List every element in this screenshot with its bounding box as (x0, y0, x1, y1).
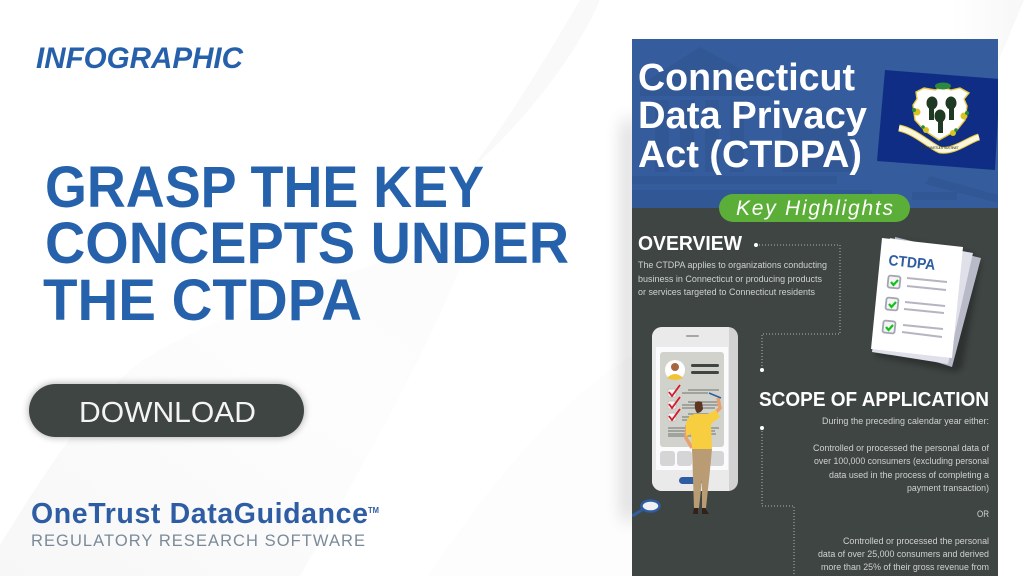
illustration: phone with person (652, 327, 738, 514)
panel title: Data Privacy (638, 95, 867, 137)
logo: OneTrust DataGuidance: TM (368, 506, 379, 515)
text: scope body (813, 416, 990, 573)
main heading: CONCEPTS UNDER (45, 211, 569, 276)
text: scope body: payment transaction) (907, 483, 989, 494)
text: overview body: business in Connecticut or producing products (638, 274, 822, 285)
text: overview body: The CTDPA applies to organizations conducting (638, 260, 827, 271)
logo: OneTrust DataGuidance: REGULATORY RESEARCH SOFTWARE (31, 532, 365, 550)
panel title: Act (CTDPA) (638, 134, 862, 176)
main heading: GRASP THE KEY (45, 155, 484, 220)
download button (29, 384, 304, 437)
icon: CTDPA checklist document (871, 237, 981, 372)
connector: scope continuation (760, 426, 794, 576)
connector: overview to scope (754, 243, 840, 372)
pill: key highlights (719, 194, 910, 222)
text: overview body: or services targeted to Connecticut residents (638, 287, 815, 298)
text: scope body: data used in the process of completing a (829, 470, 990, 481)
download button: DOWNLOAD (79, 397, 256, 429)
main heading (43, 155, 569, 333)
icon: magnifying glass (632, 500, 660, 516)
pill: key highlights: Key Highlights (736, 197, 894, 220)
logo: OneTrust DataGuidance: OneTrust DataGuidance (31, 498, 368, 530)
text: scope body: OR (977, 509, 989, 520)
panel header band (632, 39, 998, 208)
panel title: Connecticut (638, 57, 855, 99)
logo: OneTrust DataGuidance (31, 498, 379, 550)
text: scope body: more than 25% of their gross revenue from (821, 562, 989, 573)
icon: Connecticut flag (877, 70, 1000, 170)
text: scope body: over 100,000 consumers (excluding personal (814, 456, 989, 467)
text: scope body: data of over 25,000 consumers and derived (818, 549, 989, 560)
text: scope body: Controlled or processed the personal data of (813, 443, 989, 454)
icon: CTDPA checklist document: CTDPA (888, 252, 936, 274)
panel: infographic preview (632, 39, 1000, 576)
heading: overview: OVERVIEW (638, 233, 742, 255)
panel title (638, 57, 867, 176)
main heading: THE CTDPA (43, 268, 362, 333)
text: overview body (638, 260, 827, 298)
text: scope body: During the preceding calendar year either: (822, 416, 989, 427)
heading: scope of application: SCOPE OF APPLICATION (759, 389, 989, 411)
text: scope body: Controlled or processed the personal (843, 536, 989, 547)
flag motto: QUI TRANSTULIT SUSTINET (919, 146, 960, 150)
label: infographic: INFOGRAPHIC (36, 42, 244, 75)
